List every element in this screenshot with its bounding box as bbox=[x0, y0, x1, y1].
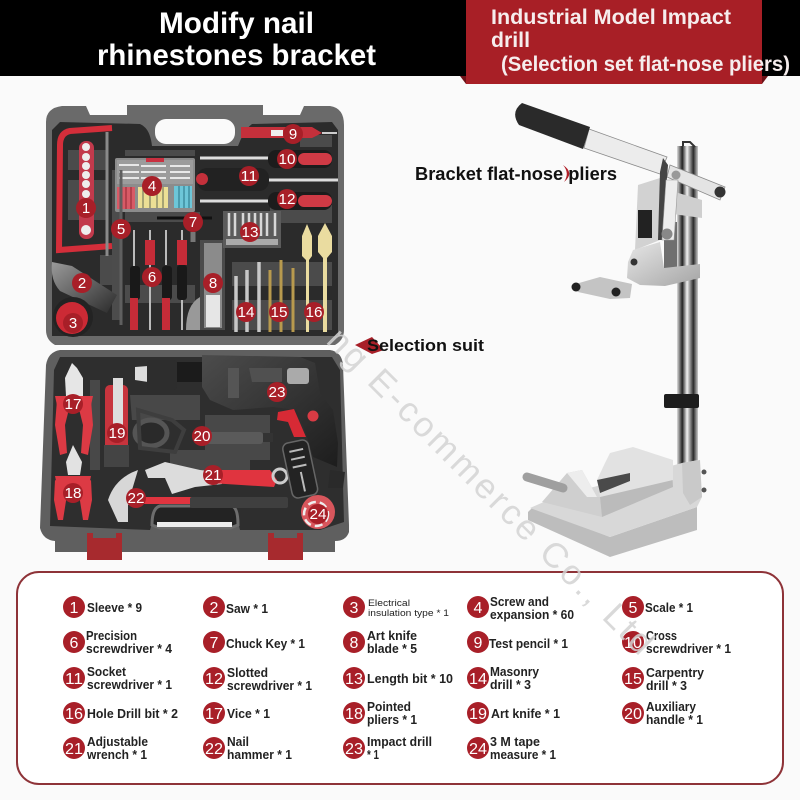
tool: tape measure bbox=[301, 495, 335, 529]
row 3: screwdriver * 1 bbox=[227, 679, 312, 693]
tool: art knife bbox=[104, 378, 129, 467]
row 4: Hole Drill bit * 2 bbox=[87, 707, 178, 721]
row 3: Masonry bbox=[490, 665, 539, 679]
stand column bbox=[664, 142, 699, 468]
numbered badges on toolbox: 7 bbox=[189, 214, 197, 231]
row 5: 22 bbox=[205, 741, 223, 758]
heading ribbon: impact drill bbox=[460, 0, 790, 84]
row 2: 8 bbox=[350, 635, 359, 652]
row 1: Screw and bbox=[490, 595, 549, 609]
numbered badges on toolbox: 16 bbox=[306, 304, 322, 321]
row 3: drill * 3 bbox=[646, 679, 687, 693]
numbered badges on toolbox bbox=[63, 124, 328, 524]
numbered badges on toolbox: 10 bbox=[278, 151, 296, 168]
lever handle bbox=[515, 103, 726, 240]
numbered badges on toolbox: 4 bbox=[148, 178, 156, 195]
row 5: Adjustable bbox=[87, 735, 148, 749]
numbered badges on toolbox: 23 bbox=[268, 384, 286, 401]
numbered badges on toolbox: 22 bbox=[128, 490, 144, 507]
tool: pointed pliers bbox=[54, 445, 92, 520]
row 2: screwdriver * 1 bbox=[646, 642, 731, 656]
row 4: Art knife * 1 bbox=[491, 707, 560, 721]
row 2: Chuck Key * 1 bbox=[226, 637, 305, 651]
row 5: Nail bbox=[227, 735, 249, 749]
row 3: screwdriver * 1 bbox=[87, 678, 172, 692]
row 3: Socket bbox=[87, 665, 127, 679]
row 1: Electrical bbox=[368, 598, 410, 608]
numbered badges on toolbox: 3 bbox=[69, 315, 77, 332]
row 5: 3 M tape bbox=[490, 735, 540, 749]
row 2: 7 bbox=[210, 635, 219, 652]
latches bbox=[87, 533, 303, 560]
row 5: 24 bbox=[469, 741, 487, 758]
tool: carpentry drills bbox=[270, 260, 293, 332]
tool: impact drill bbox=[135, 355, 345, 488]
row 1: Saw * 1 bbox=[226, 602, 268, 616]
row 3: Carpentry bbox=[646, 666, 704, 680]
toolbox base with tools bbox=[40, 350, 349, 560]
numbered badges on toolbox: 13 bbox=[242, 224, 258, 241]
drill stand bracket bbox=[515, 103, 726, 557]
tool: scale bbox=[120, 170, 122, 325]
row 2: Test pencil * 1 bbox=[489, 637, 568, 651]
tool: tape bbox=[53, 297, 93, 337]
numbered badges on toolbox: 11 bbox=[240, 168, 258, 185]
row 3: Length bit * 10 bbox=[367, 672, 453, 686]
tool: masonry drills bbox=[236, 262, 259, 332]
toolbox lid with tools bbox=[46, 105, 344, 345]
row 4 bbox=[63, 700, 703, 727]
numbered badges on toolbox: 18 bbox=[64, 485, 82, 502]
numbered badges on toolbox: 21 bbox=[204, 467, 222, 484]
numbered badges on toolbox: 24 bbox=[310, 506, 326, 523]
row 4: Vice * 1 bbox=[227, 707, 270, 721]
row 5: measure * 1 bbox=[490, 748, 556, 762]
stand head casting bbox=[627, 178, 702, 286]
tool: screw box bbox=[115, 158, 195, 212]
row 2: Cross bbox=[646, 629, 677, 643]
row 5: Impact drill bbox=[367, 735, 432, 749]
row 2: 10 bbox=[624, 635, 642, 652]
heading: bracket bbox=[97, 7, 376, 72]
row 2: 6 bbox=[70, 635, 79, 652]
parts list panel bbox=[17, 572, 783, 784]
heading ribbon: impact drill: drill bbox=[491, 29, 530, 52]
row 1: insulation type * 1 bbox=[368, 608, 449, 618]
row 1: 3 bbox=[350, 600, 359, 617]
numbered badges on toolbox: 19 bbox=[108, 425, 126, 442]
row 4: 18 bbox=[345, 706, 363, 723]
row 4: Auxiliary bbox=[646, 700, 696, 714]
heading ribbon: impact drill: Industrial Model Impact bbox=[491, 6, 731, 29]
heading ribbon: impact drill: (Selection set flat-nose pliers) bbox=[501, 53, 790, 76]
row 3: 14 bbox=[469, 671, 487, 688]
row 2: Art knife bbox=[367, 629, 417, 643]
numbered badges on toolbox: 8 bbox=[209, 275, 217, 292]
numbered badges on toolbox: 17 bbox=[64, 396, 82, 413]
row 3: 11 bbox=[65, 671, 83, 688]
row 4: 16 bbox=[65, 706, 83, 723]
numbered badges on toolbox: 20 bbox=[194, 428, 210, 445]
row 4: pliers * 1 bbox=[367, 713, 417, 727]
callout: bracket label: Bracket flat-nose pliers bbox=[415, 164, 617, 184]
row 4: 19 bbox=[469, 706, 487, 723]
row 2: Precision bbox=[86, 629, 137, 643]
row 4: handle * 1 bbox=[646, 713, 703, 727]
row 2: 9 bbox=[474, 635, 483, 652]
tool: vice pliers bbox=[55, 363, 93, 455]
tool: test pencil bbox=[241, 127, 337, 138]
numbered badges on toolbox: 6 bbox=[148, 269, 156, 286]
row 1 bbox=[63, 595, 693, 622]
tool: cross screwdriver bbox=[200, 150, 332, 168]
tool: bit holder bbox=[282, 439, 319, 499]
row 1: 1 bbox=[70, 600, 79, 617]
row 1: Sleeve * 9 bbox=[87, 601, 142, 615]
row 4: Pointed bbox=[367, 700, 411, 714]
tool: saw bbox=[52, 128, 117, 313]
row 4: 17 bbox=[205, 706, 223, 723]
row 5: 23 bbox=[345, 741, 363, 758]
tool: slotted screwdriver bbox=[200, 192, 332, 210]
row 4: 20 bbox=[624, 706, 642, 723]
tool: precision screwdrivers bbox=[130, 218, 212, 330]
numbered badges on toolbox: 9 bbox=[289, 126, 297, 143]
tool: nail hammer bbox=[108, 470, 288, 522]
row 5: * 1 bbox=[367, 748, 379, 762]
numbered badges on toolbox: 12 bbox=[278, 191, 296, 208]
numbered badges on toolbox: 14 bbox=[238, 304, 254, 321]
row 1: 2 bbox=[210, 600, 219, 617]
tool: sleeve bar bbox=[79, 141, 94, 239]
tool: art knife blade bbox=[186, 243, 222, 330]
row 5: hammer * 1 bbox=[227, 748, 292, 762]
tool: chuck key bbox=[190, 232, 196, 242]
vice and base bbox=[527, 447, 706, 557]
tool: length bits bbox=[223, 211, 281, 248]
tool: socket screwdriver bbox=[196, 168, 338, 191]
numbered badges on toolbox: 15 bbox=[270, 304, 288, 321]
row 1: Scale * 1 bbox=[645, 601, 693, 615]
header band bbox=[0, 0, 800, 76]
row 1: expansion * 60 bbox=[490, 608, 574, 622]
row 2 bbox=[63, 629, 731, 656]
heading: bracket: rhinestones bracket bbox=[97, 39, 376, 72]
callout: selection suit: Selection suit bbox=[367, 336, 484, 355]
watermark: ng E-commerce Co., Ltd bbox=[319, 320, 662, 662]
row 3: 15 bbox=[624, 671, 642, 688]
row 3: 12 bbox=[205, 671, 223, 688]
row 2: blade * 5 bbox=[367, 642, 417, 656]
row 3: 13 bbox=[345, 671, 363, 688]
tool: adjustable wrench bbox=[145, 462, 287, 494]
row 3: drill * 3 bbox=[490, 678, 531, 692]
numbered badges on toolbox: 2 bbox=[78, 275, 86, 292]
tool: hole drill bits bbox=[302, 223, 332, 332]
tool: auxiliary handle bbox=[135, 410, 273, 452]
row 1: 4 bbox=[474, 600, 483, 617]
row 1: 5 bbox=[629, 600, 638, 617]
drill clamp ring bbox=[572, 277, 632, 299]
numbered badges on toolbox: 1 bbox=[82, 200, 90, 217]
row 5: 21 bbox=[65, 741, 83, 758]
heading: bracket: Modify nail bbox=[159, 7, 314, 40]
row 3 bbox=[63, 665, 704, 693]
numbered badges on toolbox: 5 bbox=[117, 221, 125, 238]
row 2: screwdriver * 4 bbox=[86, 642, 172, 656]
row 3: Slotted bbox=[227, 666, 268, 680]
row 5: wrench * 1 bbox=[86, 748, 147, 762]
row 5 bbox=[63, 735, 556, 762]
